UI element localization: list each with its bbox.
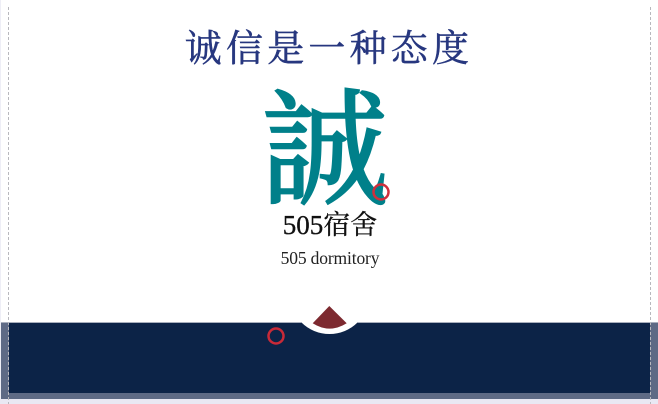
dashed guide left [8,7,10,404]
large character: 誠 [262,83,388,222]
panel: navy band [9,323,650,393]
icon: red ring on band [267,327,285,345]
icon: red sector [313,306,347,329]
title: 诚信是一种态度 [185,29,473,70]
heading: room name: 505宿舍 [283,210,377,240]
dashed guide right [650,7,652,404]
notch in band top [290,254,370,334]
icon: red ring on character [372,183,390,201]
subheading: English room name: 505 dormitory [281,248,379,268]
panel: slate outer band [1,323,658,399]
